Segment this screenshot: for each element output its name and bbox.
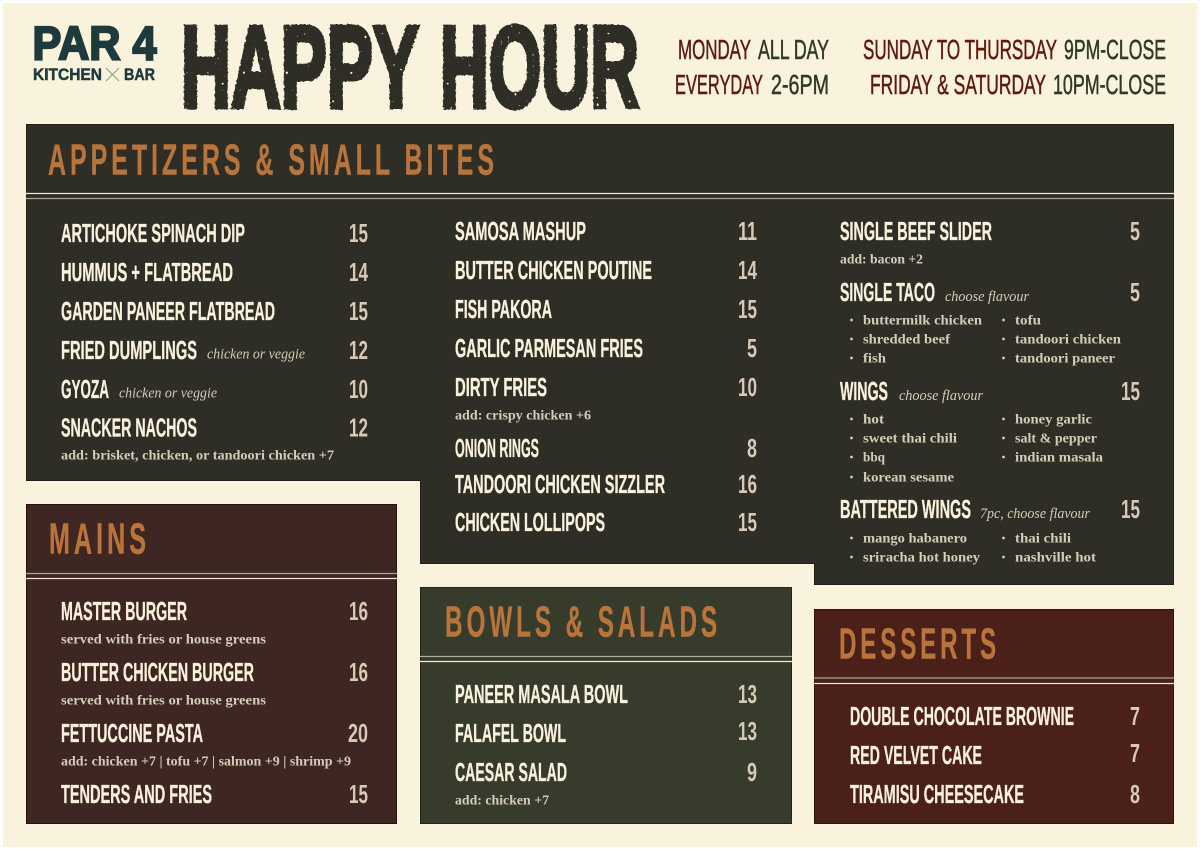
item: single beef slider: add: bacon +2 [840, 253, 923, 268]
hours: happy hour days: 2-6PM [771, 69, 829, 100]
item: battered wings: BATTERED WINGS [840, 494, 971, 524]
hours: late night: SUNDAY TO THURSDAY [863, 34, 1057, 65]
item: chicken lollipops: 15 [738, 507, 757, 537]
logo: Par 4 Kitchen x Bar: KITCHEN [33, 66, 102, 84]
item: single taco [840, 277, 1140, 367]
item: wings: korean sesame [863, 471, 954, 486]
item: single taco: tandoori chicken [1015, 333, 1121, 348]
item: battered wings: 15 [1121, 494, 1140, 524]
panel: bowls and salads [420, 588, 792, 824]
item: gyoza [61, 374, 368, 404]
item: samosa mashup: 11 [738, 216, 757, 246]
item: onion rings: ONION RINGS [455, 433, 539, 463]
hours: happy hour days: MONDAY [678, 34, 751, 65]
item: garden paneer flatbread: GARDEN PANEER FLATBREAD [61, 296, 275, 326]
panel: desserts [814, 610, 1174, 824]
item: fish pakora [455, 294, 757, 324]
item: gyoza: GYOZA [61, 374, 109, 404]
item: snacker nachos [61, 412, 368, 464]
item: garlic parmesan fries: GARLIC PARMESAN FRIES [455, 333, 643, 363]
item: single beef slider: 5 [1130, 216, 1140, 246]
item: wings: sweet thai chili [863, 432, 957, 447]
item: tenders and fries: 15 [349, 779, 368, 809]
heading: desserts: DESSERTS [839, 620, 1000, 668]
item: tandoori chicken sizzler: 16 [738, 469, 757, 499]
item: garlic parmesan fries: 5 [747, 333, 757, 363]
item: master burger [61, 596, 368, 648]
hours: happy hour days: EVERYDAY [675, 69, 763, 100]
item: battered wings: thai chili [1015, 532, 1071, 547]
item: single taco: tandoori paneer [1015, 352, 1115, 367]
item: butter chicken poutine: 14 [738, 255, 757, 285]
item: single taco: shredded beef [863, 333, 950, 348]
item: chicken lollipops: CHICKEN LOLLIPOPS [455, 507, 605, 537]
item: butter chicken burger: served with fries or house greens [61, 694, 267, 709]
item: single taco: tofu [1015, 314, 1041, 329]
item: wings: salt & pepper [1015, 432, 1097, 447]
logo: Par 4 Kitchen x Bar: BAR [124, 66, 155, 84]
hours: late night [863, 34, 1166, 100]
item: master burger: 16 [349, 596, 368, 626]
logo: Par 4 Kitchen x Bar: PAR 4 [32, 16, 156, 70]
item: wings: hot [863, 413, 884, 428]
item: wings: WINGS [840, 376, 888, 406]
heading: bowls and salads: BOWLS & SALADS [445, 598, 721, 646]
item: hummus flatbread: 14 [349, 257, 368, 287]
item: wings: 15 [1121, 376, 1140, 406]
item: master burger: served with fries or house greens [61, 633, 267, 648]
item: red velvet cake: 7 [1130, 738, 1140, 768]
item: tandoori chicken sizzler: TANDOORI CHICKEN SIZZLER [455, 469, 665, 499]
item: butter chicken poutine: BUTTER CHICKEN POUTINE [455, 255, 652, 285]
item: falafel bowl [455, 716, 757, 748]
item: caesar salad: add: chicken +7 [455, 794, 549, 809]
item: battered wings: sriracha hot honey [863, 551, 980, 566]
item: tiramisu cheesecake: TIRAMISU CHEESECAKE [850, 779, 1024, 809]
item: fettuccine pasta: 20 [348, 718, 368, 748]
title: Happy Hour: HAPPY [181, 2, 419, 132]
item: fried dumplings: 12 [349, 335, 368, 365]
item: wings: honey garlic [1015, 413, 1092, 428]
item: single taco: fish [863, 352, 886, 367]
hours: late night: FRIDAY & SATURDAY [870, 69, 1046, 100]
item: wings: indian masala [1015, 451, 1103, 466]
item: battered wings: nashville hot [1015, 551, 1096, 566]
item: snacker nachos: SNACKER NACHOS [61, 412, 197, 442]
item: gyoza: 10 [349, 374, 368, 404]
item: fried dumplings: FRIED DUMPLINGS [61, 335, 197, 365]
item: snacker nachos: 12 [349, 412, 368, 442]
item: wings: bbq [863, 451, 885, 466]
item: fettuccine pasta: add: chicken +7 | tofu +7 | salmon +9 | shrimp +9 [61, 755, 351, 770]
panel: mains [26, 504, 397, 824]
item: falafel bowl: 13 [738, 716, 757, 746]
item: artichoke spinach dip: ARTICHOKE SPINACH DIP [61, 218, 245, 248]
item: red velvet cake: RED VELVET CAKE [850, 740, 982, 770]
item: hummus flatbread: HUMMUS + FLATBREAD [61, 257, 233, 287]
item: butter chicken burger: BUTTER CHICKEN BURGER [61, 657, 254, 687]
item: artichoke spinach dip: 15 [349, 218, 368, 248]
item: battered wings: mango habanero [863, 532, 967, 547]
item: snacker nachos: add: brisket, chicken, or tandoori chicken +7 [61, 449, 334, 464]
item: wings: choose flavour [899, 388, 983, 404]
item: paneer masala bowl: PANEER MASALA BOWL [455, 679, 628, 709]
item: fettuccine pasta [61, 718, 368, 770]
item: wings [840, 376, 1140, 486]
item: caesar salad: 9 [747, 757, 757, 787]
item: garden paneer flatbread: 15 [349, 296, 368, 326]
item: double chocolate brownie: 7 [1130, 701, 1140, 731]
item: single taco: 5 [1130, 277, 1140, 307]
item: tenders and fries: TENDERS AND FRIES [61, 779, 212, 809]
item: fish pakora: 15 [738, 294, 757, 324]
heading: appetizers: APPETIZERS & SMALL BITES [48, 136, 498, 184]
item: battered wings: 7pc, choose flavour [980, 506, 1090, 522]
item: samosa mashup: SAMOSA MASHUP [455, 216, 586, 246]
item: fried dumplings: chicken or veggie [207, 346, 305, 362]
item: onion rings [455, 433, 757, 463]
item: dirty fries: add: crispy chicken +6 [455, 409, 591, 424]
item: dirty fries: 10 [738, 372, 757, 402]
item: tiramisu cheesecake: 8 [1130, 779, 1140, 809]
item: single taco: SINGLE TACO [840, 277, 935, 307]
item: dirty fries: DIRTY FRIES [455, 372, 547, 402]
item: battered wings [840, 494, 1140, 566]
item: butter chicken burger: 16 [349, 657, 368, 687]
item: single taco: choose flavour [945, 289, 1029, 305]
item: master burger: MASTER BURGER [61, 596, 187, 626]
item: single taco: buttermilk chicken [863, 314, 982, 329]
item: fish pakora: FISH PAKORA [455, 294, 552, 324]
hours: happy hour days [675, 34, 829, 100]
item: falafel bowl: FALAFEL BOWL [455, 718, 566, 748]
item: fettuccine pasta: FETTUCCINE PASTA [61, 718, 203, 748]
item: onion rings: 8 [747, 433, 757, 463]
item: single beef slider: SINGLE BEEF SLIDER [840, 216, 992, 246]
item: single beef slider [840, 216, 1140, 268]
item: paneer masala bowl: 13 [738, 679, 757, 709]
panel: appetizers and small bites [26, 124, 1174, 584]
item: dirty fries [455, 372, 757, 424]
item: gyoza: chicken or veggie [119, 386, 217, 402]
item: caesar salad [455, 757, 757, 809]
heading: mains: MAINS [49, 514, 150, 564]
title: Happy Hour: HOUR [440, 2, 639, 132]
hours: happy hour days: ALL DAY [758, 34, 829, 65]
item: butter chicken burger [61, 657, 368, 709]
item: caesar salad: CAESAR SALAD [455, 757, 567, 787]
